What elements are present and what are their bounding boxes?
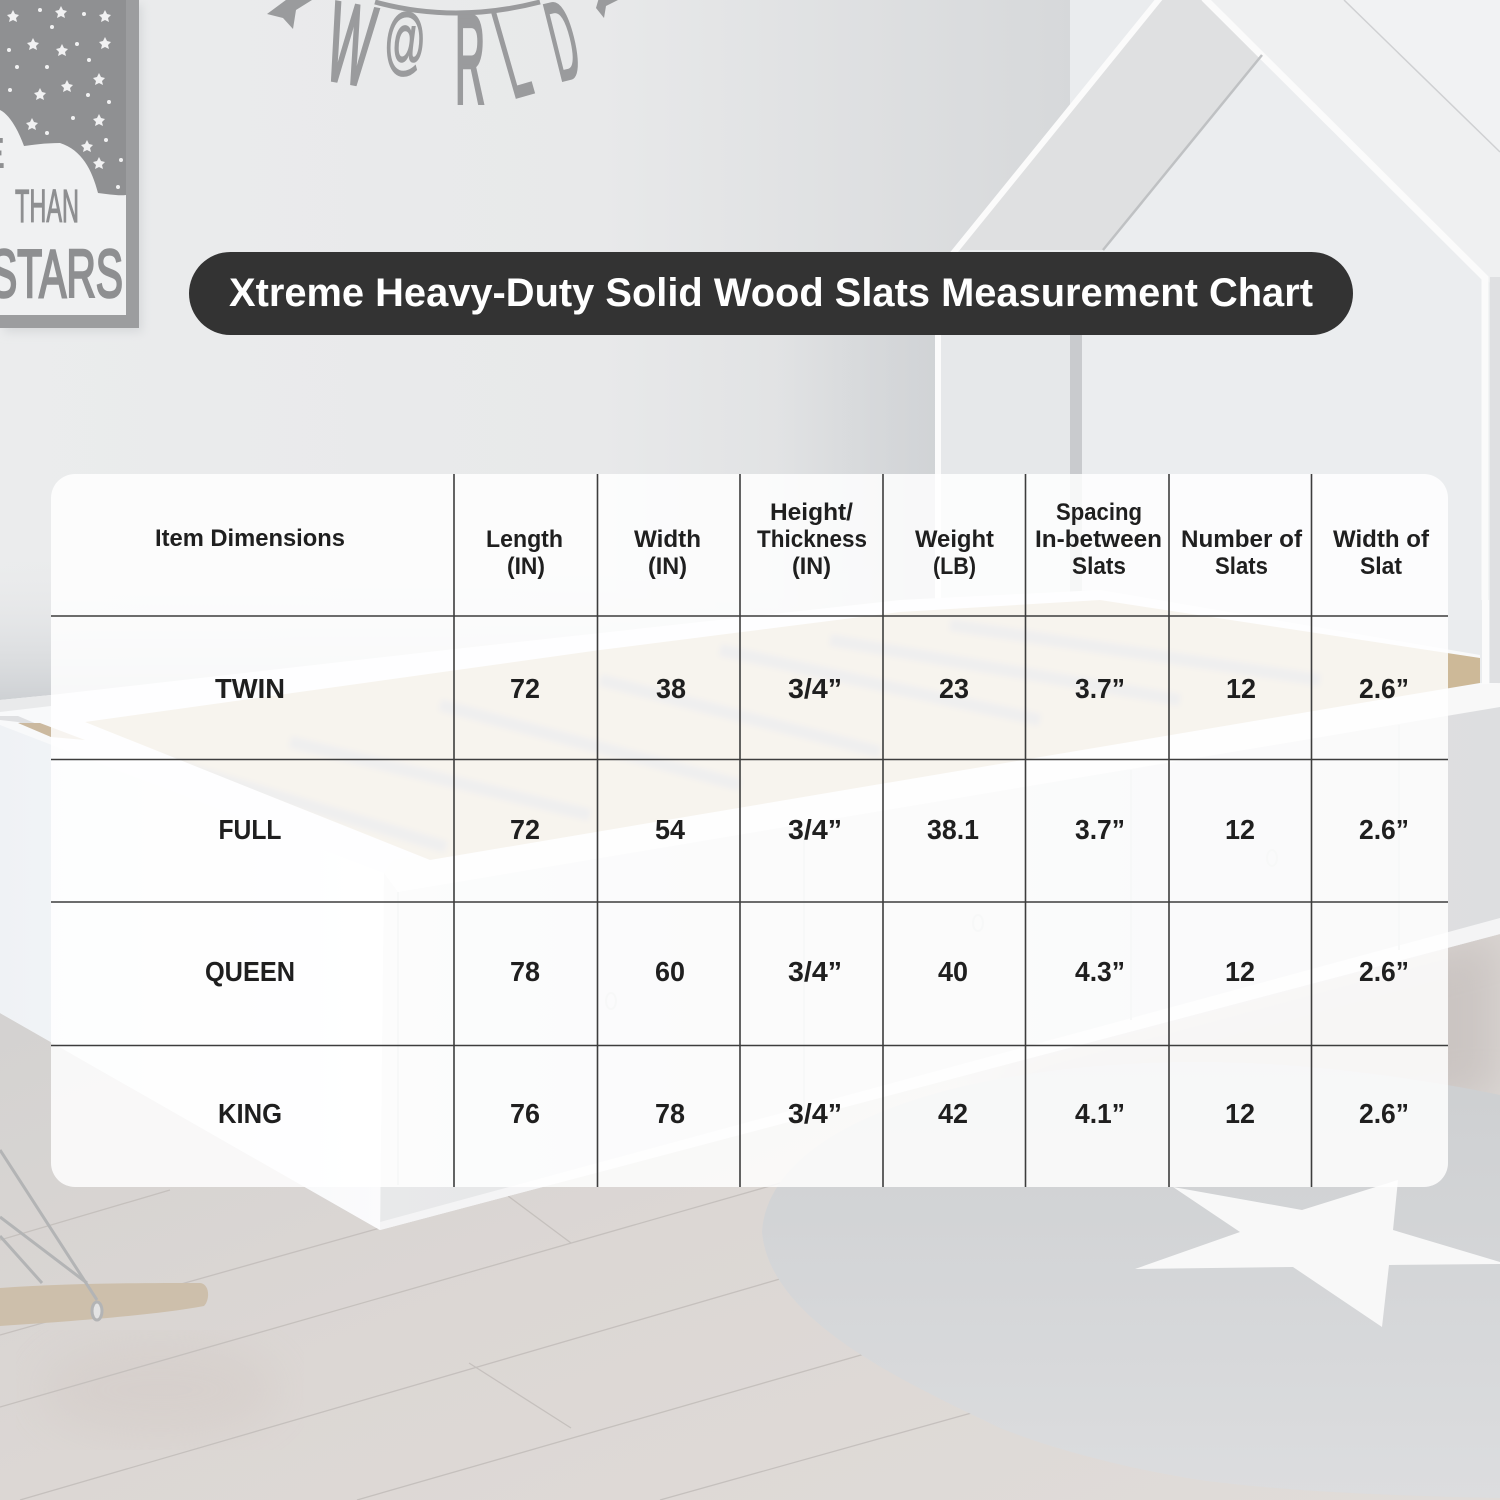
table row: twin: 38 [656,673,686,704]
background: round rug with star [762,1062,1500,1498]
table row: king [218,1098,1409,1129]
background: house-shaped bed frame [935,0,1500,700]
table row: king: 12 [1225,1098,1255,1129]
table row: full: 72 [510,814,540,845]
table row: twin: 23 [939,673,969,704]
table row: king: KING [218,1098,282,1129]
background: bedroom wall [0,0,1500,1100]
title pill: Xtreme Heavy-Duty Solid Wood Slats Measurement Chart [229,271,1313,315]
table header row: Length [486,526,563,553]
background: wood floor [0,900,1500,1500]
wall decal: world lettering [267,0,618,130]
table row: queen: 3/4” [788,956,842,987]
table row: queen [205,956,1409,987]
table row: twin: 3/4” [788,673,842,704]
table row: full: FULL [218,814,282,845]
table row: twin: 12 [1226,673,1256,704]
table row: twin: 2.6” [1359,673,1409,704]
table header row: (IN) [648,553,687,580]
table header row: Thickness [757,526,867,553]
wall poster: more than stars: THAN [15,180,79,232]
table row: queen: 12 [1225,956,1255,987]
table row: twin: 72 [510,673,540,704]
table header row: (IN) [792,553,831,580]
background: white bed with slats [0,590,1500,1230]
wall decal: world lettering: @ [384,0,426,82]
table row: twin: TWIN [215,673,285,704]
table row: queen: 78 [510,956,540,987]
table header row: In-between [1035,526,1162,553]
table header row [155,499,1430,580]
table header row: (LB) [933,553,976,580]
table row: queen: 4.3” [1075,956,1125,987]
table row: full: 2.6” [1359,814,1409,845]
table row: king: 3/4” [788,1098,842,1129]
background: rocking chair [0,1150,208,1326]
table header row: Slats [1072,553,1126,580]
table header row: Width of [1333,526,1430,553]
table header row: Slats [1215,553,1268,580]
table panel [51,474,1448,1187]
table row: king: 42 [938,1098,968,1129]
table header row: Weight [915,526,994,553]
table row: king: 78 [655,1098,685,1129]
table header row: Height/ [770,499,853,526]
table row: queen: 40 [938,956,968,987]
table row: queen: 2.6” [1359,956,1409,987]
table header row: Spacing [1056,499,1142,526]
title pill [189,252,1353,335]
table row: full: 54 [655,814,686,845]
table row: twin: 3.7” [1075,673,1125,704]
table row: full: 38.1 [927,814,979,845]
table row: king: 2.6” [1359,1098,1409,1129]
table row: full [218,814,1409,845]
table row: king: 4.1” [1075,1098,1125,1129]
table row: queen: QUEEN [205,956,295,987]
table header row: Number of [1181,526,1303,553]
table header row: Slat [1360,553,1402,580]
table header row: (IN) [507,553,545,580]
table row: queen: 60 [655,956,685,987]
table row: twin [215,673,1409,704]
table header row: Width [634,526,701,553]
table row: full: 12 [1225,814,1255,845]
wall poster: more than stars [0,0,142,332]
table row: full: 3.7” [1075,814,1125,845]
table row: king: 76 [510,1098,540,1129]
table header row: Item Dimensions [155,525,345,552]
table row: full: 3/4” [788,814,842,845]
